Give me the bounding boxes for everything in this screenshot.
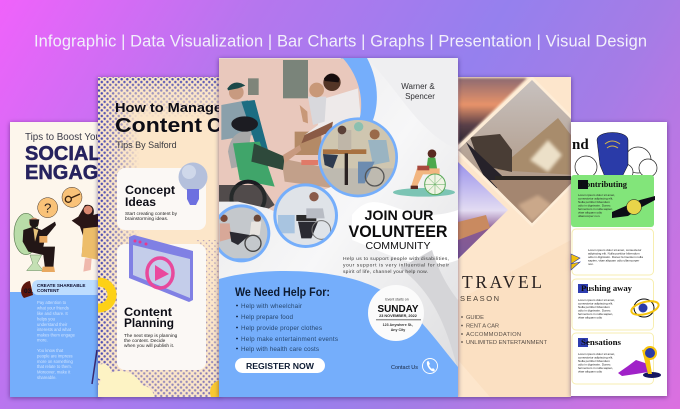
travel list: ACCOMMODATION bbox=[466, 332, 521, 338]
poster 2 heading bbox=[115, 101, 222, 150]
card: text block: non. bbox=[588, 262, 594, 266]
poster 1 body text bbox=[37, 300, 76, 380]
decoration: yellow ring right bbox=[210, 380, 219, 397]
poster 2 heading: Tips By Salford bbox=[116, 140, 177, 150]
card: contributing: odio in dignissim. Donec bbox=[578, 204, 611, 208]
poster 1 body text: shareable. bbox=[37, 375, 57, 380]
poster 1 body text: interests and what bbox=[37, 327, 72, 332]
card: sensations: vitae aliquam odio bbox=[578, 370, 603, 374]
section band 03: CONTENT bbox=[37, 288, 59, 293]
travel list: UNLIMITED ENTERTAINMENT bbox=[466, 340, 547, 346]
help list: Help prepare food bbox=[241, 314, 293, 321]
card: sensations: Sensations bbox=[581, 338, 621, 347]
card: contributing: consectetur adipiscing elit. bbox=[578, 196, 613, 200]
card: contributing: fermentum in nulla sapien bbox=[578, 207, 613, 211]
event badge bbox=[368, 285, 424, 341]
card: concept ideas: brainstorming ideas. bbox=[125, 216, 168, 222]
poster 1 body text: Moreover, make it bbox=[37, 370, 71, 374]
poster 2 heading: Content bbox=[115, 115, 202, 137]
panel: travel poster bbox=[456, 75, 574, 401]
icon: wheelchair person bbox=[393, 149, 455, 197]
card: content planning bbox=[117, 244, 206, 370]
poster 2 heading: How to Manage bbox=[115, 101, 222, 115]
panel: social engagement poster bbox=[6, 120, 102, 401]
card: sensations: fermentum in nulla sapien, bbox=[578, 366, 613, 370]
poster 1 body text: people are impress bbox=[37, 354, 73, 358]
poster 4 heading bbox=[460, 276, 541, 301]
card: text block: odio in dignissim. Donec fermentum nulla bbox=[588, 255, 643, 259]
decoration: yellow ring bbox=[86, 282, 112, 308]
photo: city sunset bbox=[458, 78, 527, 145]
illustration: conversation: ? bbox=[44, 200, 51, 215]
contact us: Contact Us bbox=[391, 365, 418, 371]
card: pushing away: Lorem ipsum dolor sit amet, bbox=[578, 298, 615, 302]
travel list: RENT A CAR bbox=[466, 324, 499, 330]
event badge: 123 Anywhere St., bbox=[383, 323, 413, 327]
photo: volunteers bbox=[212, 55, 398, 262]
card: content planning: the content. Decide bbox=[124, 338, 166, 344]
poster 1 body text: Pay attention to bbox=[37, 300, 67, 305]
description text: your support is very influential for their bbox=[343, 262, 449, 268]
brand name: Spencer bbox=[405, 92, 435, 101]
poster 1 body text: helps you bbox=[37, 316, 56, 322]
poster 1 body text: that relate to them. bbox=[37, 364, 72, 369]
poster 1 heading: ENGAGEMENT bbox=[25, 162, 168, 184]
poster 1 body text: more on something bbox=[37, 359, 74, 364]
card: sensations: Nulla porttitor bibendum bbox=[578, 359, 610, 363]
blue lower panel bbox=[219, 271, 458, 397]
event badge: Any City bbox=[391, 328, 405, 332]
register button bbox=[235, 358, 325, 373]
card: pushing away: consectetur adipiscing elit. bbox=[578, 302, 613, 306]
photo circle: wheelchair desk bbox=[273, 183, 338, 248]
travel list bbox=[461, 315, 547, 346]
poster 1 body text: makes them engage bbox=[37, 332, 76, 338]
card: concept ideas bbox=[117, 168, 206, 230]
poster 4 heading: SEASON bbox=[460, 294, 499, 303]
card: text block bbox=[571, 229, 654, 275]
brand name: Warner & bbox=[401, 82, 435, 91]
help heading: We Need Help For: bbox=[235, 287, 330, 299]
card: contributing: ullamcorper non. bbox=[578, 214, 601, 218]
help list: Help make entertainment events bbox=[241, 336, 338, 343]
event badge: SUNDAY bbox=[378, 303, 418, 315]
card: pushing away: fermentum in nulla sapien, bbox=[578, 312, 613, 316]
travel list: GUIDE bbox=[466, 315, 484, 321]
call to action heading: COMMUNITY bbox=[366, 241, 431, 252]
poster 1 body text: understand their bbox=[37, 322, 68, 327]
call to action heading: VOLUNTEER bbox=[348, 222, 448, 241]
card: contributing: Lorem ipsum dolor sit amet, bbox=[578, 193, 615, 197]
card: pushing away: Pushing away bbox=[581, 284, 632, 293]
panel: mind poster bbox=[571, 122, 667, 396]
card: text block: adipiscing elit. Nulla porttitor bibendum bbox=[588, 252, 640, 256]
help list: Help with health care costs bbox=[241, 346, 319, 353]
title: Infographic | Data Visualization | Bar Charts | Graphs | Presentation | Visual Design bbox=[34, 32, 647, 50]
poster 1 body text: like and share. It bbox=[37, 311, 69, 316]
register button: REGISTER NOW bbox=[246, 362, 314, 371]
description text bbox=[343, 256, 449, 275]
poster 1 heading bbox=[25, 132, 98, 180]
card: content planning: Content bbox=[124, 307, 172, 319]
card: sensations: Lorem ipsum dolor sit amet, bbox=[578, 352, 615, 356]
description text: spirit of life, channel your help now. bbox=[343, 269, 428, 275]
photo: louvre pyramid diamond bbox=[458, 77, 571, 226]
icon: video window bbox=[129, 235, 193, 302]
panel: content planning poster bbox=[94, 74, 222, 401]
event badge: Event starts on bbox=[385, 298, 409, 302]
card: content planning: The next step is planning bbox=[124, 333, 178, 339]
card: pushing away: odio in dignissim. Donec bbox=[578, 308, 611, 312]
event badge: 23 NOVEMBER, 2022 bbox=[379, 314, 417, 318]
poster 1 body text: more. bbox=[37, 338, 48, 342]
icon: light bulb bbox=[178, 162, 208, 205]
help list: Help with wheelchair bbox=[241, 303, 302, 310]
card: content planning: Planning bbox=[124, 318, 174, 330]
poster 4 heading: TRAVEL bbox=[462, 272, 542, 292]
card: sensations: odio in dignissim. Donec bbox=[578, 362, 611, 366]
card: pushing away: Nulla porttitor bibendum bbox=[578, 305, 610, 309]
description text: Help us to support people with disabilities, bbox=[343, 256, 449, 262]
card: text block: sapien, vitae aliquam odio ullamcorper bbox=[588, 258, 639, 262]
card: pushing away: vitae aliquam odio bbox=[578, 316, 603, 320]
poster 1 body text: what your friends bbox=[37, 306, 69, 310]
poster 5 heading: nd bbox=[572, 137, 589, 153]
photo circle: office bbox=[318, 117, 398, 198]
poster 2 heading: C bbox=[207, 115, 221, 137]
card: pushing away bbox=[572, 279, 660, 330]
card: content planning: when you will publish it. bbox=[124, 343, 174, 349]
section band 03: CREATE SHAREABLE bbox=[37, 283, 85, 288]
section band 03 bbox=[21, 280, 102, 298]
card: contributing: Nulla porttitor bibendum bbox=[578, 200, 610, 204]
card: concept ideas: Concept bbox=[125, 185, 175, 197]
section band 03: 03. bbox=[24, 288, 33, 295]
card: sensations: consectetur adipiscing elit. bbox=[578, 356, 613, 360]
call to action heading: JOIN OUR bbox=[364, 207, 434, 223]
photo: purple skyline bbox=[458, 162, 508, 259]
icon: head with clouds bbox=[575, 132, 657, 180]
poster 1 heading: SOCIAL bbox=[25, 143, 101, 165]
card: contributing: vitae aliquam odio bbox=[578, 210, 603, 214]
help list bbox=[236, 303, 338, 353]
icon: phone bbox=[422, 358, 438, 374]
card: concept ideas: Start creating content by bbox=[125, 211, 178, 217]
card: concept ideas: Ideas bbox=[125, 197, 156, 209]
photo circle: therapy bbox=[219, 204, 270, 262]
illustration: conversation bbox=[14, 187, 99, 272]
decoration: cream flower bbox=[98, 364, 155, 397]
brand name bbox=[401, 82, 435, 101]
card: sensations bbox=[572, 333, 661, 384]
panel: volunteer poster bbox=[212, 55, 458, 397]
poster 1 heading: Tips to Boost Your bbox=[25, 132, 105, 143]
card: text block: Lorem ipsum dolor sit amet, consectetur bbox=[588, 248, 641, 252]
help list: Help provide proper clothes bbox=[241, 325, 322, 332]
poster 1 body text: You know that bbox=[37, 348, 64, 353]
call to action heading bbox=[348, 210, 448, 249]
card: contributing bbox=[571, 175, 655, 227]
card: contributing: Contributing bbox=[580, 180, 627, 189]
